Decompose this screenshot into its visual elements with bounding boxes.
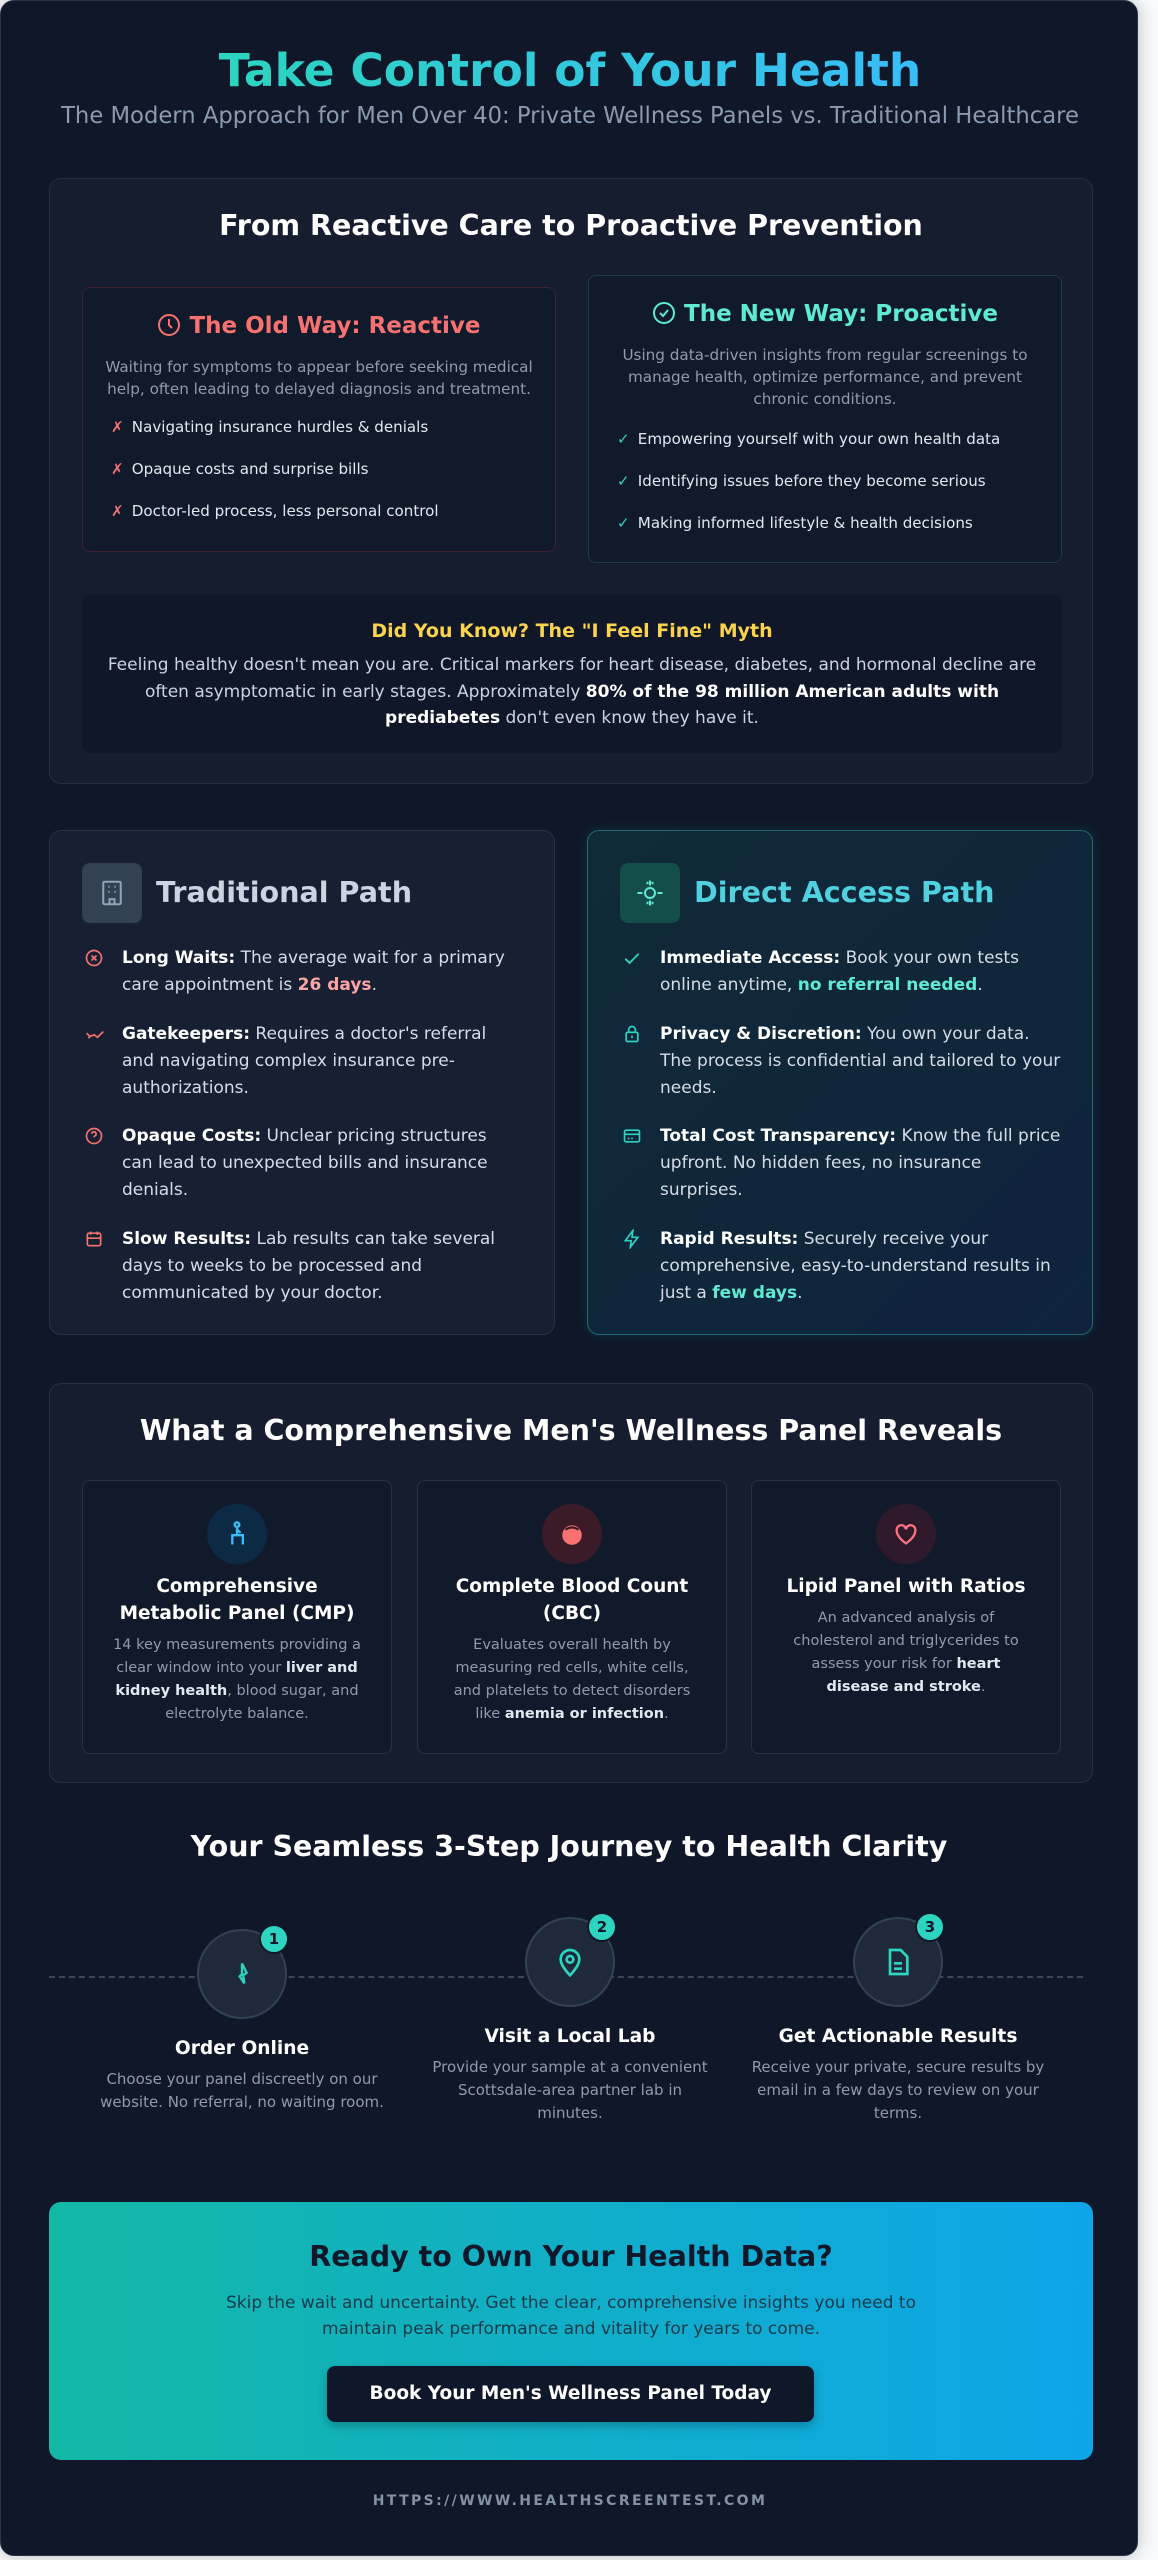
- step 1: [100, 1926, 384, 2111]
- card: CBC: Evaluates overall health by: [473, 1637, 671, 1653]
- item: slow results: days to weeks to be processed and: [122, 1256, 422, 1276]
- step 3: email in a few days to review on your: [757, 2081, 1039, 2099]
- badge 3: [915, 1912, 945, 1942]
- icon: chip: [620, 863, 680, 923]
- card: CMP: Comprehensive: [156, 1576, 318, 1597]
- card: new way: ✓: [617, 514, 630, 532]
- callout: did you know: prediabetes don't even know they have it.: [385, 708, 759, 728]
- item: cost transparency: Total Cost Transparency: Know the full price: [660, 1126, 1060, 1146]
- subtitle: The Modern Approach for Men Over 40: Private Wellness Panels vs. Traditional Healthcare: [61, 103, 1079, 129]
- icon: heart: [876, 1504, 936, 1564]
- card: lipid: disease and stroke.: [826, 1679, 986, 1695]
- card: lipid: assess your risk for heart: [812, 1656, 1000, 1672]
- heading: old way: The Old Way: Reactive: [189, 313, 481, 339]
- item: rapid results: [624, 1228, 1051, 1302]
- icon: document: [853, 1917, 943, 2007]
- card: CMP: 14 key measurements providing a: [113, 1637, 361, 1653]
- card: CBC: [417, 1480, 727, 1754]
- panel: traditional path: [49, 830, 555, 1335]
- item: privacy: The process is confidential and tailored to your: [660, 1050, 1060, 1070]
- item: immediate access: Immediate Access: Book your own tests: [660, 948, 1019, 968]
- step 3: terms.: [874, 2104, 922, 2122]
- card: lipid: Lipid Panel with Ratios: [787, 1576, 1025, 1597]
- step 3: [752, 1914, 1044, 2122]
- callout: did you know: often asymptomatic in early stages. Approximately 80% of the 98 million American adults with: [145, 682, 999, 702]
- badge 1: [259, 1924, 289, 1954]
- item: cost transparency: [624, 1126, 1060, 1200]
- item: privacy: Privacy & Discretion: You own your data.: [660, 1024, 1030, 1044]
- item: rapid results: comprehensive, easy-to-understand results in: [660, 1256, 1051, 1276]
- card: new way: ✓: [617, 430, 630, 448]
- step 1: website. No referral, no waiting room.: [100, 2093, 384, 2111]
- heading: traditional path: Traditional Path: [156, 875, 412, 909]
- card: CMP: kidney health, blood sugar, and: [115, 1683, 359, 1699]
- heading: direct access path: Direct Access Path: [694, 875, 995, 909]
- badge 1: 1: [269, 1930, 279, 1948]
- item: long waits: Long Waits: The average wait for a primary: [122, 948, 505, 968]
- item: opaque costs: Opaque Costs: Unclear pricing structures: [122, 1126, 487, 1146]
- heading: 3-step journey: Your Seamless 3-Step Journey to Health Clarity: [191, 1830, 947, 1863]
- step 3: Get Actionable Results: [779, 2026, 1017, 2047]
- card: new way: Identifying issues before they become serious: [638, 472, 986, 490]
- panel: reactive vs proactive: [49, 178, 1093, 784]
- item: immediate access: online anytime, no referral needed.: [660, 975, 983, 995]
- step 1: Order Online: [175, 2038, 309, 2059]
- card: CBC: and platelets to detect disorders: [454, 1683, 690, 1699]
- title: Take Control of Your Health: [219, 44, 921, 97]
- card: lipid: [751, 1480, 1061, 1754]
- item: opaque costs: can lead to unexpected bills and insurance: [122, 1153, 488, 1173]
- step 1: Choose your panel discreetly on our: [106, 2070, 378, 2088]
- item: rapid results: Rapid Results: Securely receive your: [660, 1228, 988, 1248]
- card: old way: Navigating insurance hurdles & denials: [132, 418, 428, 436]
- card: new way: manage health, optimize performance, and prevent: [628, 368, 1022, 386]
- card: CBC: Complete Blood Count: [456, 1576, 688, 1597]
- card: CBC: like anemia or infection.: [475, 1706, 669, 1722]
- item: slow results: communicated by your doctor.: [122, 1282, 383, 1302]
- card: CBC: measuring red cells, white cells,: [455, 1660, 689, 1676]
- card: CMP: Metabolic Panel (CMP): [120, 1603, 354, 1624]
- card: new way: [588, 275, 1062, 563]
- card: new way: ✓: [617, 472, 630, 490]
- heading: from reactive to proactive: From Reactive Care to Proactive Prevention: [219, 209, 923, 242]
- icon: blood: [542, 1504, 602, 1564]
- heading: new way: The New Way: Proactive: [684, 301, 998, 327]
- footer url: HTTPS://WWW.HEALTHSCREENTEST.COM: [373, 2493, 767, 2509]
- item: opaque costs: [86, 1126, 488, 1200]
- card: old way: ✗: [111, 502, 124, 520]
- card: new way: chronic conditions.: [753, 390, 897, 408]
- item: slow results: Slow Results: Lab results can take several: [122, 1228, 495, 1248]
- step 2: Provide your sample at a convenient: [432, 2058, 708, 2076]
- icon: pen: [197, 1929, 287, 2019]
- item: slow results: [86, 1228, 495, 1302]
- heading: wellness panel: What a Comprehensive Men's Wellness Panel Reveals: [140, 1414, 1002, 1447]
- badge 2: 2: [597, 1918, 607, 1936]
- card: old way: Waiting for symptoms to appear before seeking medical: [105, 358, 533, 376]
- button: Book Your Men's Wellness Panel Today: [370, 2383, 771, 2404]
- icon: location: [525, 1917, 615, 2007]
- card: new way: Using data-driven insights from regular screenings to: [622, 346, 1028, 364]
- item: gatekeepers: and navigating complex insurance pre-: [122, 1050, 455, 1070]
- card: lipid: An advanced analysis of: [818, 1610, 994, 1626]
- icon: building: [82, 863, 142, 923]
- button: [327, 2366, 814, 2422]
- card: old way: ✗: [111, 418, 124, 436]
- callout: did you know: [82, 595, 1062, 753]
- card: old way: ✗: [111, 460, 124, 478]
- step 2: [432, 1914, 708, 2122]
- item: gatekeepers: [86, 1024, 486, 1098]
- icon: person: [207, 1504, 267, 1564]
- card: old way: Opaque costs and surprise bills: [132, 460, 368, 478]
- step 2: Scottsdale-area partner lab in: [458, 2081, 682, 2099]
- item: gatekeepers: authorizations.: [122, 1078, 249, 1098]
- item: cost transparency: surprises.: [660, 1180, 743, 1200]
- badge 3: 3: [925, 1918, 935, 1936]
- item: gatekeepers: Gatekeepers: Requires a doctor's referral: [122, 1024, 486, 1044]
- card: CMP: clear window into your liver and: [116, 1660, 358, 1676]
- callout: CTA: [49, 2202, 1093, 2460]
- step 2: Visit a Local Lab: [484, 2026, 656, 2047]
- card: CBC: (CBC): [543, 1603, 601, 1624]
- card: CMP: electrolyte balance.: [165, 1706, 309, 1722]
- step 2: minutes.: [537, 2104, 603, 2122]
- item: long waits: [86, 948, 505, 995]
- callout: CTA: Skip the wait and uncertainty. Get the clear, comprehensive insights you need to: [226, 2293, 916, 2313]
- card: lipid: cholesterol and triglycerides to: [793, 1633, 1019, 1649]
- badge 2: [587, 1912, 617, 1942]
- step 3: Receive your private, secure results by: [752, 2058, 1044, 2076]
- callout: CTA: maintain peak performance and vitality for years to come.: [322, 2319, 820, 2339]
- card: old way: help, often leading to delayed diagnosis and treatment.: [107, 380, 531, 398]
- card: old way: Doctor-led process, less personal control: [132, 502, 439, 520]
- card: new way: Empowering yourself with your own health data: [638, 430, 1000, 448]
- item: opaque costs: denials.: [122, 1180, 188, 1200]
- callout: did you know: Did You Know? The "I Feel Fine" Myth: [371, 620, 773, 642]
- item: immediate access: [624, 948, 1019, 995]
- item: long waits: care appointment is 26 days.: [122, 975, 377, 995]
- panel: wellness panel reveals: [49, 1383, 1093, 1783]
- item: privacy: needs.: [660, 1078, 717, 1098]
- panel: direct access path: [587, 830, 1093, 1335]
- item: rapid results: just a few days.: [660, 1282, 803, 1302]
- callout: CTA: Ready to Own Your Health Data?: [309, 2240, 833, 2273]
- callout: did you know: Feeling healthy doesn't mean you are. Critical markers for heart disease, diabetes, and hormonal decline are: [108, 655, 1036, 675]
- card: new way: Making informed lifestyle & health decisions: [638, 514, 973, 532]
- card: CMP: [82, 1480, 392, 1754]
- item: cost transparency: upfront. No hidden fees, no insurance: [660, 1153, 981, 1173]
- item: privacy: [625, 1024, 1060, 1098]
- card: old way: [82, 287, 556, 552]
